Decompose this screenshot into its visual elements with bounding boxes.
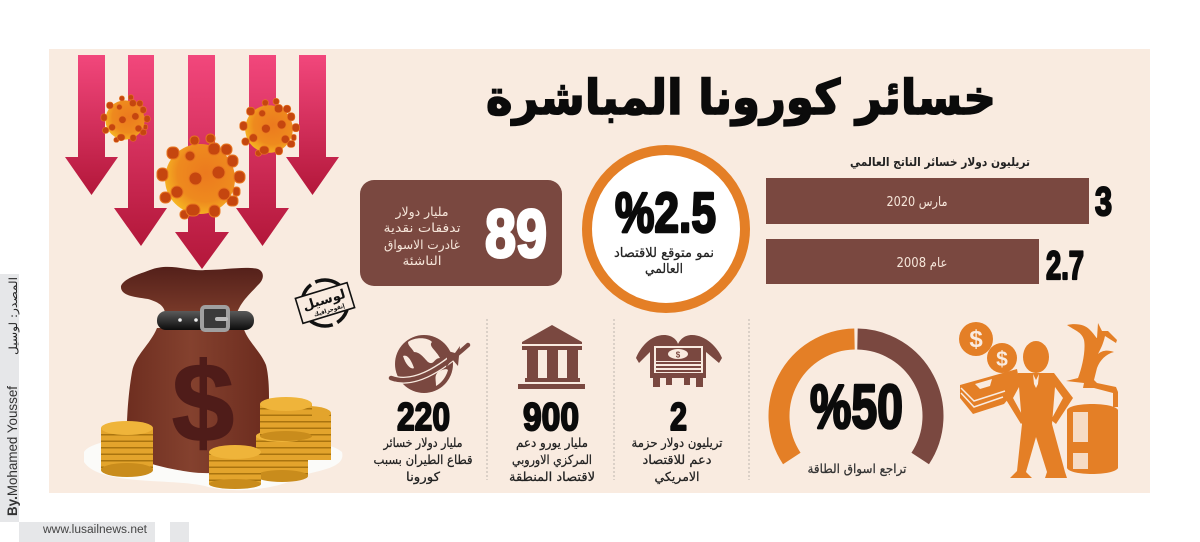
bar chart: world GDP losses bbox=[766, 155, 1112, 288]
coins bbox=[959, 322, 993, 356]
bar: March 2020 bbox=[766, 178, 1112, 224]
stat: US stimulus: الامريكي bbox=[654, 469, 700, 485]
stat: US stimulus: دعم للاقتصاد bbox=[642, 452, 712, 468]
gauge: energy markets bbox=[779, 339, 933, 477]
box: capital outflows: الناشئة bbox=[402, 253, 442, 268]
stat: ECB support: لاقتصاد المنطقة bbox=[509, 469, 595, 484]
stat: ECB support: المركزي الاوروبي bbox=[512, 452, 592, 468]
stat: ECB support: مليار يورو دعم bbox=[516, 435, 588, 451]
stat: ECB support bbox=[509, 325, 595, 484]
stat: ECB support: 900 bbox=[523, 396, 579, 439]
virus particles bbox=[101, 95, 300, 219]
stat: US stimulus: تريليون دولار حزمة bbox=[632, 435, 723, 451]
icon: bank bbox=[518, 325, 585, 389]
gauge: energy markets: تراجع اسواق الطاقة bbox=[808, 461, 907, 477]
bar: March 2020: مارس 2020 bbox=[886, 195, 948, 210]
stat: aviation losses: مليار دولار خسائر bbox=[383, 435, 462, 451]
stamp logo: إنفوجرافيك bbox=[313, 303, 346, 319]
businessman bbox=[1023, 341, 1049, 373]
title: خسائر كورونا المباشرة bbox=[486, 70, 996, 126]
bar: 2008 bbox=[766, 239, 1084, 288]
gauge: energy markets: %50 bbox=[810, 373, 903, 442]
box: capital outflows: تدفقات نقدية bbox=[384, 220, 461, 235]
stamp logo bbox=[292, 273, 358, 333]
icon: businessman with money, oil barrel and dead tree: $ bbox=[969, 326, 983, 353]
bar: 2008: عام 2008 bbox=[896, 256, 948, 271]
money bag bbox=[121, 267, 269, 473]
stat: aviation losses: قطاع الطيران بسبب bbox=[374, 452, 473, 468]
bar: March 2020: 3 bbox=[1095, 180, 1112, 224]
stat: aviation losses bbox=[374, 335, 473, 485]
author credit: By.Mohamed Youssef bbox=[4, 386, 20, 516]
stat: US stimulus bbox=[632, 335, 723, 485]
icon: globe and plane bbox=[391, 335, 468, 393]
icon: businessman with money, oil barrel and dead tree bbox=[959, 322, 1118, 478]
box: capital outflows: غادرت الاسواق bbox=[384, 237, 460, 253]
chart heading: تريليون دولار خسائر الناتج العالمي bbox=[850, 155, 1030, 170]
dead tree bbox=[1066, 323, 1118, 407]
gold coin stacks bbox=[101, 397, 331, 489]
stat: aviation losses: 220 bbox=[397, 396, 450, 439]
stamp logo: لوسيل bbox=[301, 287, 348, 314]
coin shadow bbox=[84, 434, 342, 490]
icon: businessman with money, oil barrel and dead tree: $ bbox=[996, 348, 1008, 371]
box: capital outflows bbox=[360, 180, 562, 286]
stat: US stimulus: 2 bbox=[670, 396, 687, 439]
box: capital outflows: 89 bbox=[485, 196, 547, 272]
source credit: المصدر: لوسيل bbox=[7, 277, 20, 355]
circle: global growth bbox=[587, 150, 745, 308]
box: capital outflows: مليار دولار bbox=[395, 204, 448, 220]
credit strip bbox=[0, 274, 20, 522]
falling red arrows bbox=[65, 55, 339, 269]
background panel bbox=[49, 49, 1150, 493]
circle: global growth: نمو متوقع للاقتصاد bbox=[614, 246, 714, 261]
icon: hands holding money: $ bbox=[676, 350, 681, 360]
circle: global growth: العالمي bbox=[645, 262, 683, 277]
circle: global growth: %2.5 bbox=[615, 181, 716, 245]
banknotes bbox=[960, 369, 1020, 414]
barrel bbox=[1067, 404, 1118, 474]
dollar sign: $ bbox=[172, 340, 234, 465]
website footer bbox=[19, 522, 189, 542]
icon: hands holding money bbox=[636, 335, 722, 387]
belt bbox=[157, 311, 254, 330]
stat: aviation losses: كورونا bbox=[406, 469, 440, 485]
website footer: www.lusailnews.net bbox=[42, 524, 148, 536]
bar: 2008: 2.7 bbox=[1046, 244, 1084, 288]
